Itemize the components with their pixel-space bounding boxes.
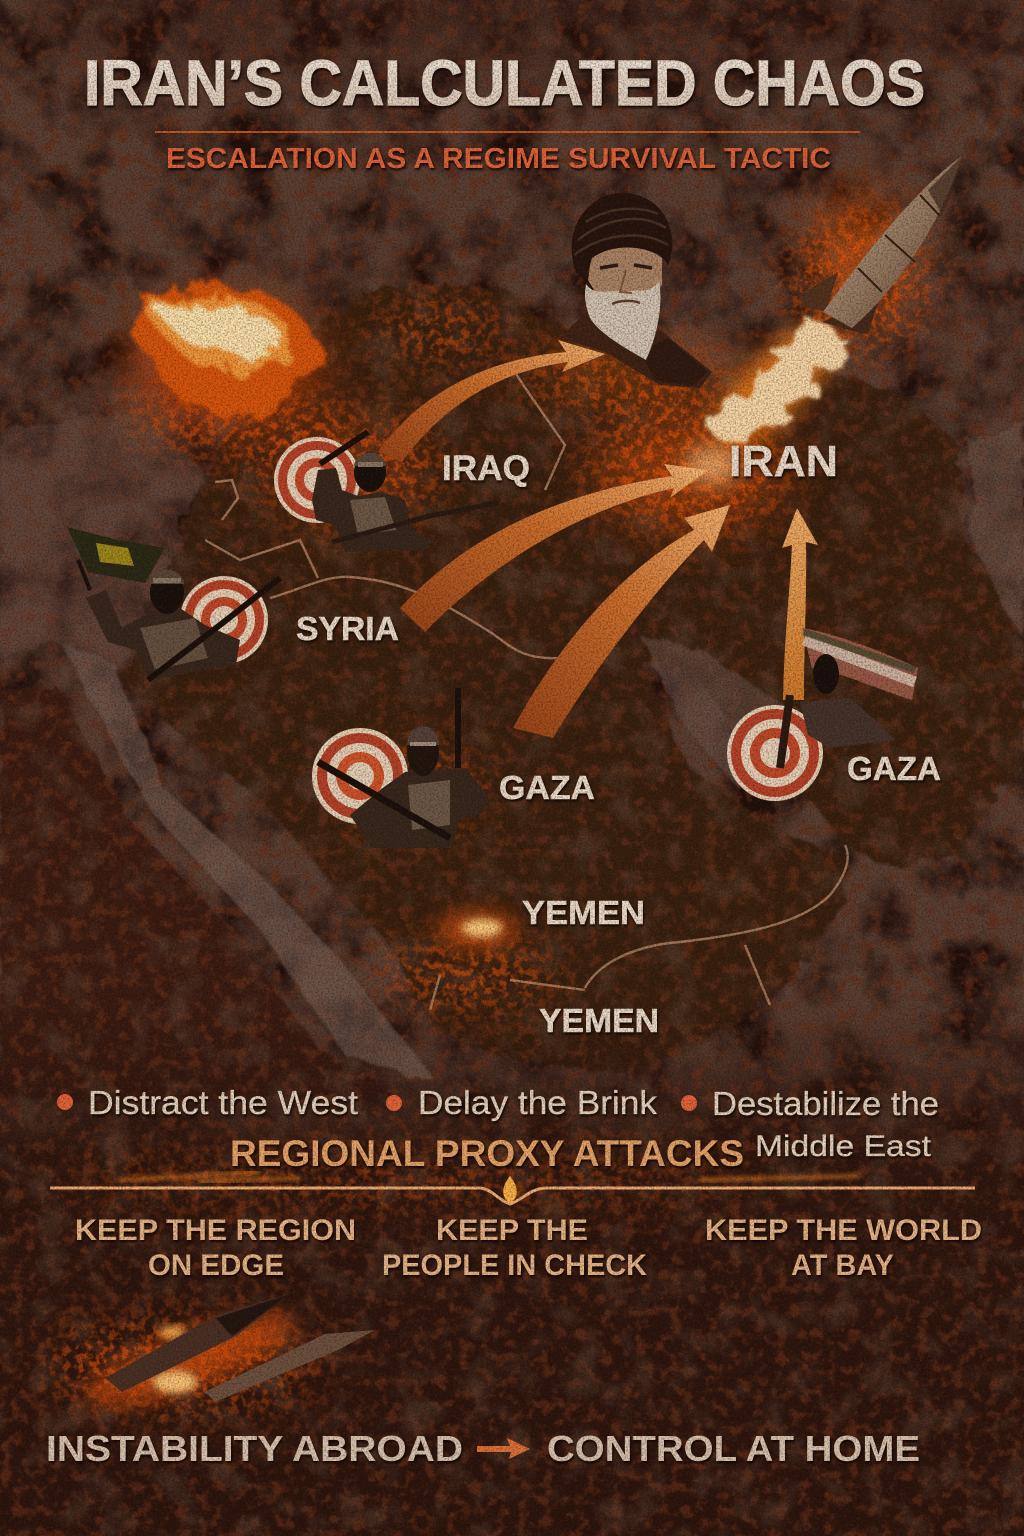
icon: small fire in Arabia [438, 910, 518, 950]
column: keep the world at bay [705, 1214, 982, 1282]
map: seas [0, 410, 1024, 1085]
map label: Iran: IRAN [729, 437, 838, 486]
column: keep the region on edge: KEEP THE REGION [75, 1214, 356, 1247]
target: Iraq [274, 437, 360, 523]
title rule [155, 131, 860, 133]
glow: orange haze around the map [275, 195, 900, 525]
icon: rocket with exhaust [696, 156, 962, 464]
turban [572, 193, 672, 276]
conclusion: control at home: CONTROL AT HOME [547, 1428, 920, 1469]
bullet list: aims: Delay the Brink [418, 1084, 658, 1121]
icon: burning missiles [78, 1294, 375, 1422]
target: Syria [180, 576, 268, 664]
arrow: Iraq to leadership [378, 340, 605, 462]
target: Gaza west [312, 728, 408, 824]
title: IRAN’S CALCULATED CHAOS [84, 47, 925, 119]
subtitle: ESCALATION AS A REGIME SURVIVAL TACTIC [166, 143, 831, 175]
map: country borders [205, 365, 848, 1010]
icon: explosion [130, 284, 320, 425]
bullet list: aims: Distract the West [88, 1084, 358, 1121]
map label: Gaza east: GAZA [847, 750, 941, 787]
soldier: Iraq [312, 432, 498, 552]
column: keep the world at bay: AT BAY [791, 1249, 894, 1282]
illustration: cleric portrait [560, 193, 712, 388]
beard [585, 280, 660, 360]
divider with flame [50, 1172, 975, 1204]
robe [560, 308, 712, 388]
soldier with flag: Gaza east [780, 628, 918, 768]
arrow: Gulf to Iran [782, 508, 818, 700]
column: keep the region on edge [75, 1214, 356, 1282]
map label: Gaza west: GAZA [499, 769, 595, 806]
column: keep the people in check [382, 1214, 647, 1282]
column: keep the people in check: KEEP THE [436, 1214, 588, 1247]
map label: Yemen upper: YEMEN [522, 894, 645, 931]
bullet list: aims [57, 1084, 939, 1163]
heading: regional proxy attacks: REGIONAL PROXY ATTACKS [230, 1133, 744, 1174]
map label: Syria: SYRIA [296, 610, 399, 647]
exhaust [706, 318, 848, 448]
glow: Iran impact [686, 447, 738, 483]
arrow: Gaza to Iran [513, 505, 730, 738]
soldier with flag: Syria [67, 527, 280, 680]
bullet list: aims: Destabilize the [712, 1085, 939, 1122]
bullet list: aims: Middle East [755, 1130, 932, 1163]
conclusion: instability abroad: INSTABILITY ABROAD [46, 1428, 463, 1469]
target: Gaza east [727, 705, 823, 801]
fins [800, 272, 838, 312]
map label: Yemen lower: YEMEN [539, 1002, 659, 1039]
column: keep the people in check: PEOPLE IN CHECK [382, 1249, 647, 1282]
soldier: Gaza west [318, 688, 490, 848]
arrow: instability to control [477, 1438, 530, 1459]
column: keep the region on edge: ON EDGE [148, 1249, 284, 1282]
body [823, 156, 962, 328]
column: keep the world at bay: KEEP THE WORLD [705, 1214, 982, 1247]
face [588, 242, 662, 305]
map label: Iraq: IRAQ [442, 449, 530, 488]
arrow: Syria to Iran [400, 464, 708, 632]
